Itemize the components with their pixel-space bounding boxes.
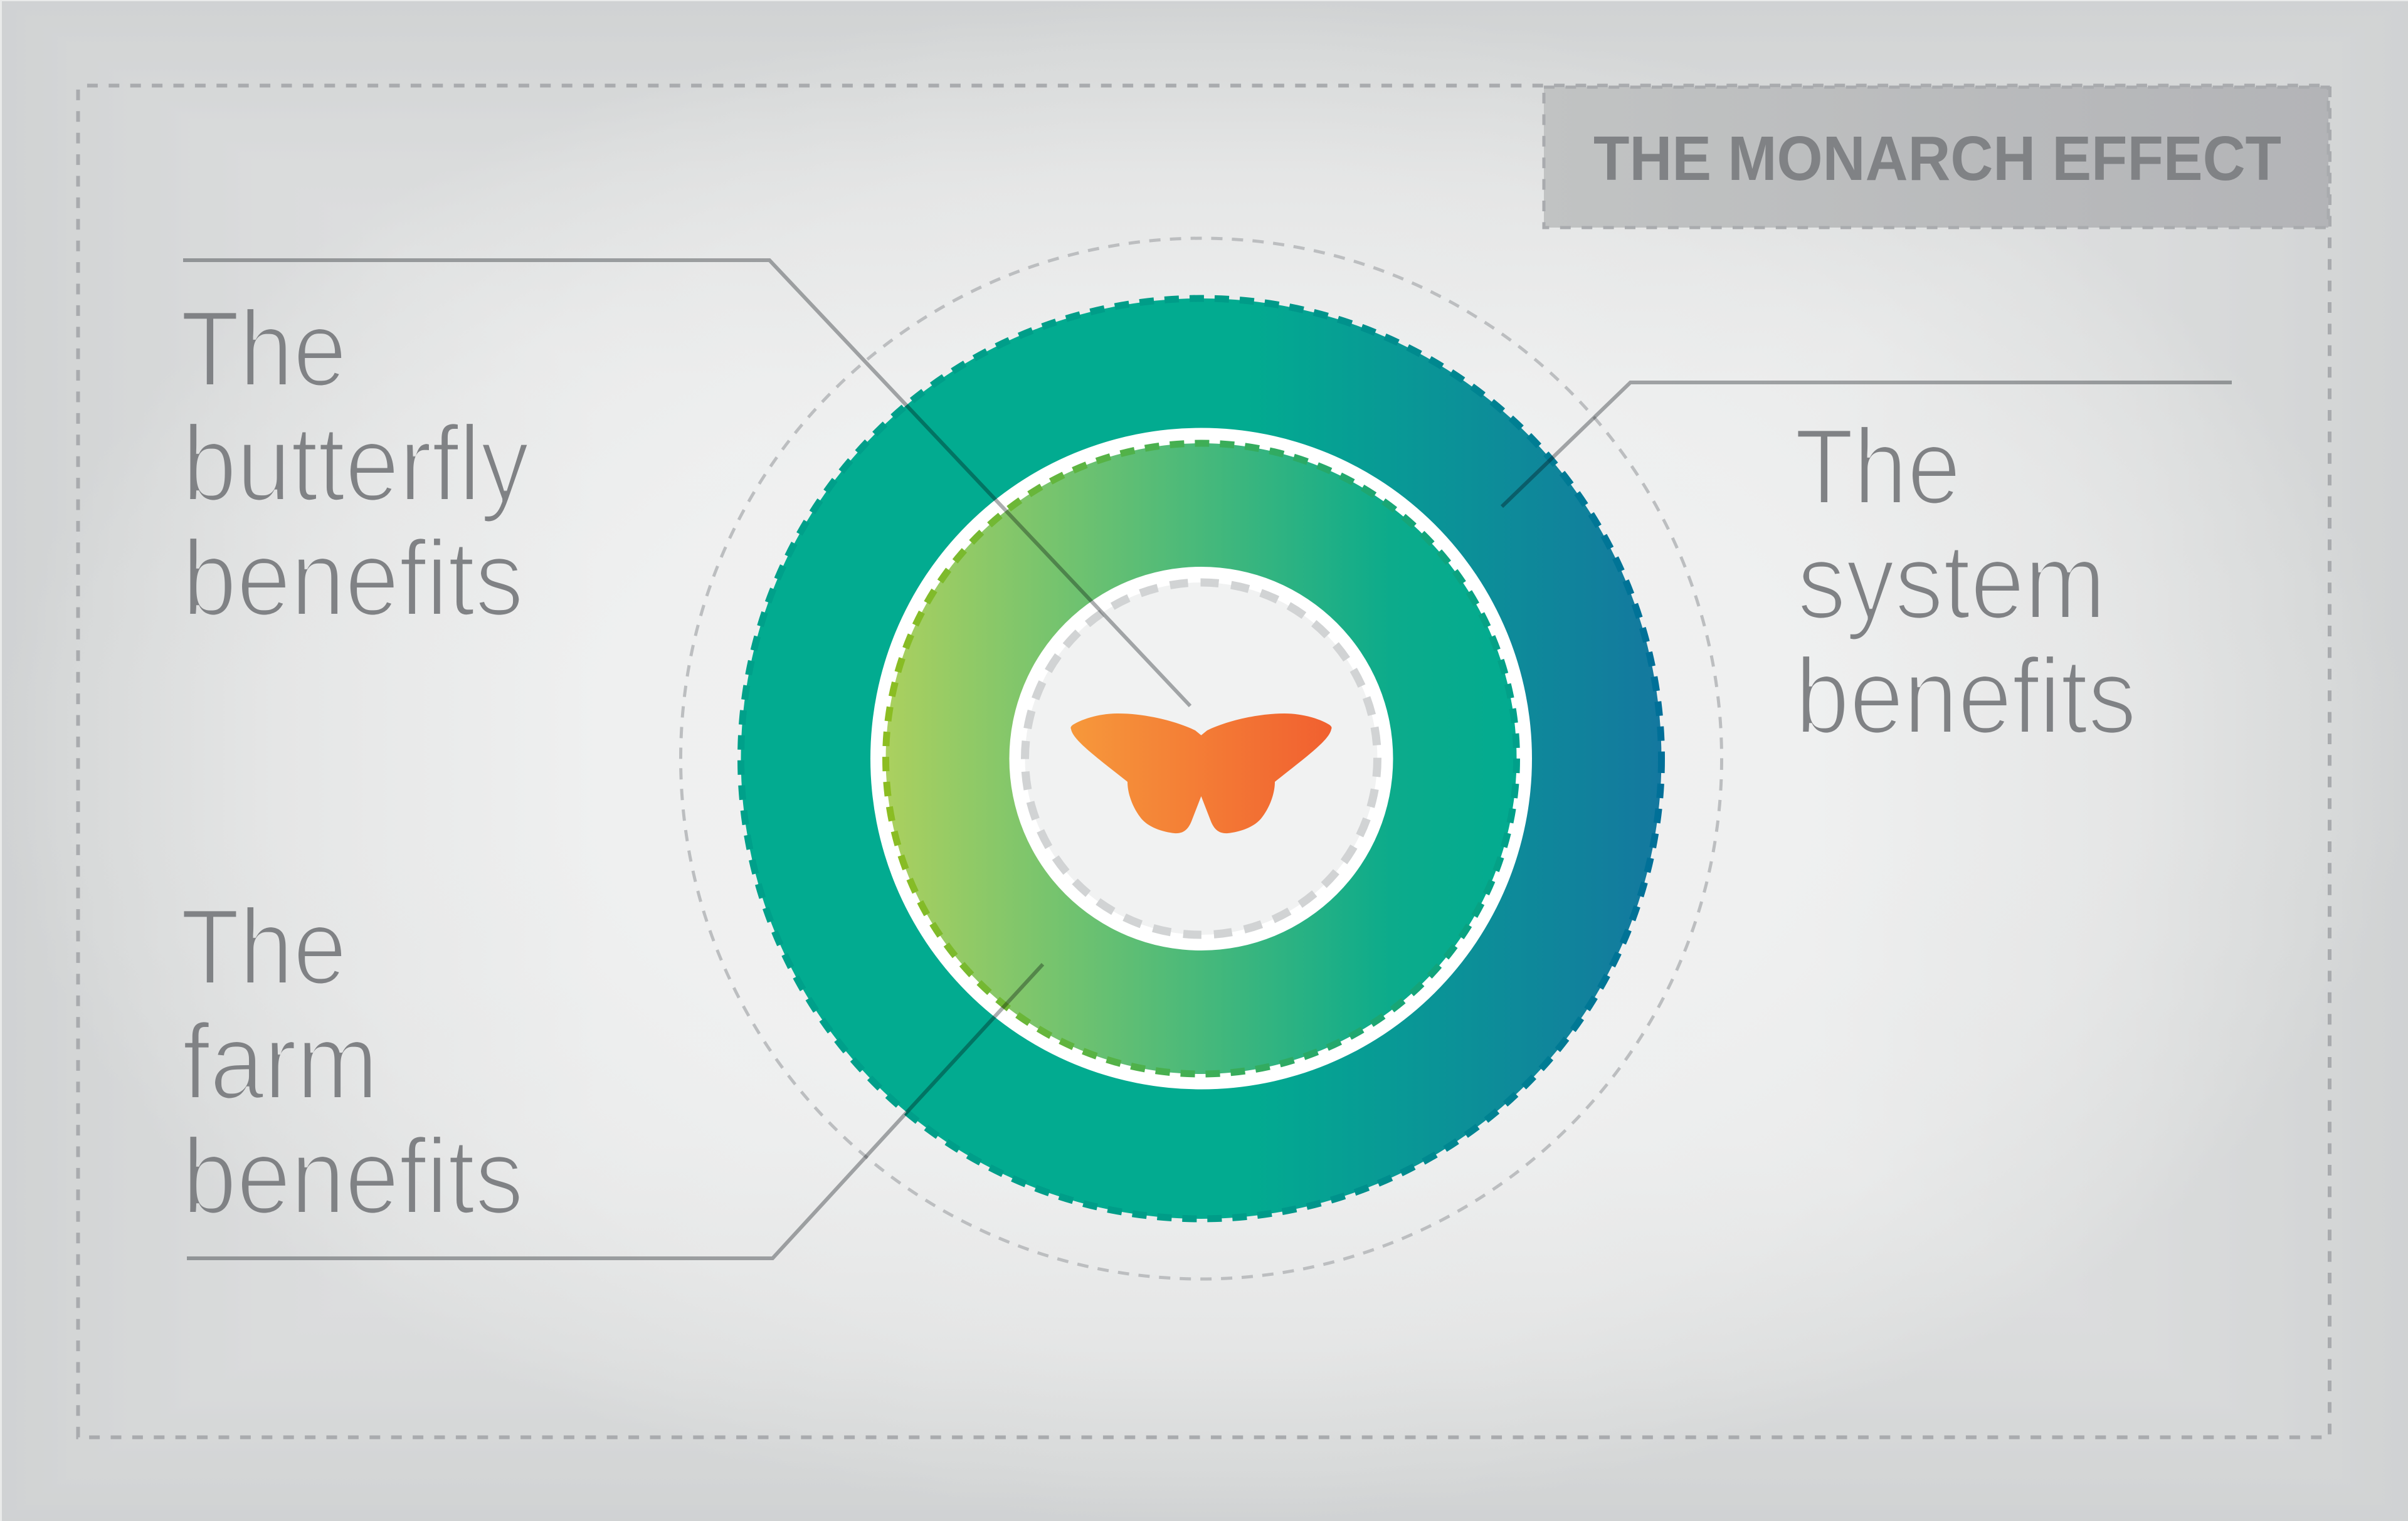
thin dashed outer circle bbox=[681, 238, 1722, 1279]
label: the butterfly benefits: The bbox=[181, 289, 347, 409]
label: the system benefits: The bbox=[1795, 407, 1961, 527]
ring: system benefits bbox=[741, 298, 1662, 1219]
label: the system benefits: system bbox=[1797, 522, 2106, 641]
label: the butterfly benefits bbox=[181, 289, 529, 638]
label: the farm benefits bbox=[181, 887, 524, 1236]
leader line: farm bbox=[187, 964, 1043, 1258]
label: the butterfly benefits: butterfly bbox=[182, 404, 529, 524]
core: butterfly benefits bbox=[1025, 582, 1377, 935]
white separator disc bbox=[870, 428, 1532, 1090]
leader line: butterfly bbox=[183, 260, 1190, 706]
label: the farm benefits: farm bbox=[182, 1002, 378, 1122]
label: the farm benefits: benefits bbox=[182, 1117, 524, 1236]
white inner disc bbox=[1010, 567, 1393, 950]
label: the system benefits bbox=[1795, 407, 2136, 756]
label: the butterfly benefits: benefits bbox=[182, 518, 524, 638]
label: the system benefits: benefits bbox=[1795, 636, 2136, 756]
title: THE MONARCH EFFECT bbox=[1593, 124, 2281, 194]
label: the farm benefits: The bbox=[181, 887, 347, 1007]
ring: farm benefits bbox=[885, 443, 1516, 1074]
icon: butterfly bbox=[1070, 713, 1332, 833]
diagram: concentric circles bbox=[681, 238, 1722, 1279]
leader line: system bbox=[1502, 382, 2232, 507]
title box bbox=[1544, 87, 2328, 228]
